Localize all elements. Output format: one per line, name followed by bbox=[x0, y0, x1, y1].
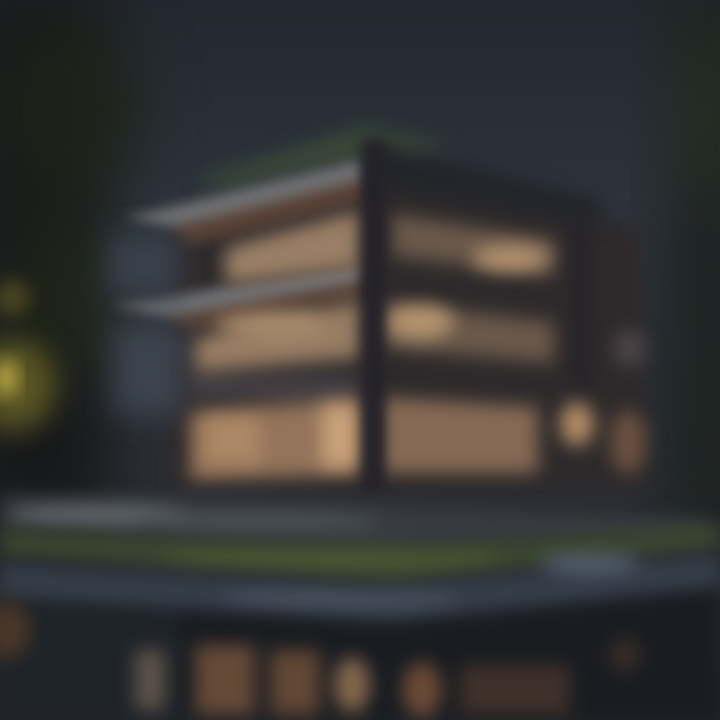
building body bbox=[170, 170, 650, 490]
reflections bbox=[0, 602, 641, 718]
central column bbox=[364, 140, 592, 490]
building bbox=[110, 125, 650, 490]
pavement bbox=[0, 495, 720, 545]
trees left bbox=[0, 0, 140, 540]
water edge bbox=[0, 554, 720, 625]
left wall grey edge bbox=[110, 235, 185, 415]
green roof bbox=[195, 125, 600, 225]
lawn bbox=[0, 525, 720, 580]
right bright spots bbox=[386, 245, 646, 474]
left glow bbox=[0, 280, 56, 431]
trees right bbox=[670, 0, 720, 540]
ground bbox=[0, 495, 720, 720]
left windows bbox=[190, 210, 360, 480]
left eaves bbox=[112, 160, 362, 330]
left bright spots bbox=[205, 311, 356, 467]
right windows bbox=[380, 214, 556, 473]
water bbox=[0, 590, 720, 720]
